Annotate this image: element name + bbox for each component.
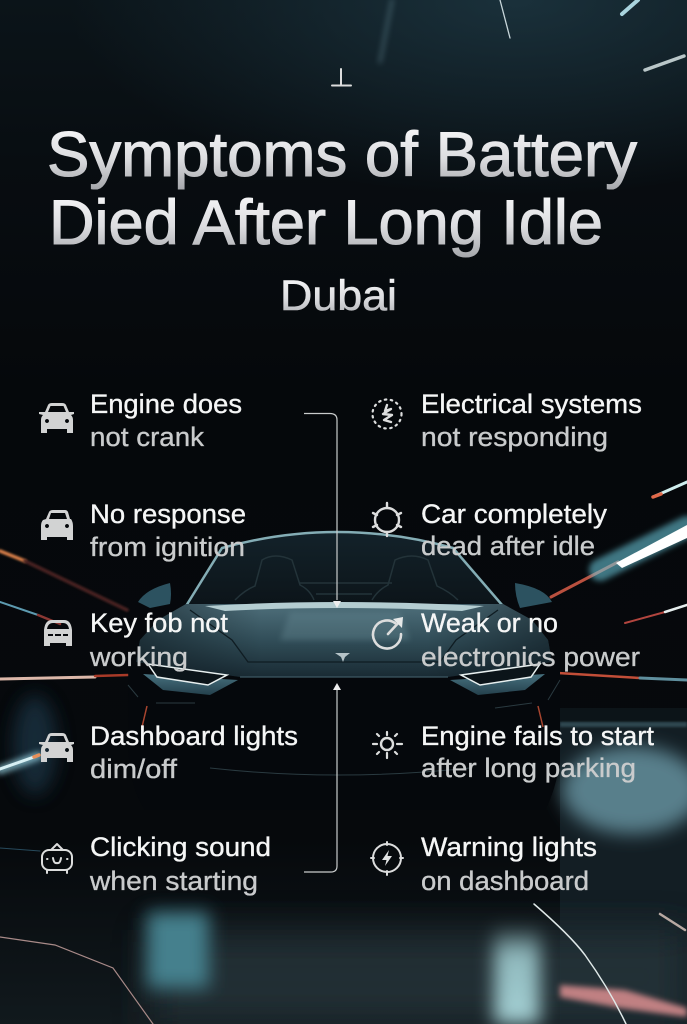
icon: car [39, 733, 74, 762]
icon: speaker box [42, 844, 72, 873]
label: working [89, 642, 188, 672]
car: left mirror [138, 583, 171, 608]
car: left headlight [148, 664, 227, 685]
icon: car [44, 620, 72, 646]
car: right bumper fin [450, 674, 545, 695]
label: Weak or no [421, 608, 558, 638]
car: lower body [128, 650, 560, 810]
arrow: top connector [304, 414, 341, 608]
symptom: weak or no electronics power [373, 608, 640, 672]
car: hood highlight [205, 602, 484, 611]
label: from ignition [90, 532, 245, 562]
car: right mirror [515, 583, 552, 608]
car: red accents [142, 706, 543, 727]
logo mark [332, 69, 351, 86]
label: Car completely [421, 499, 608, 529]
label: Engine does [90, 389, 242, 419]
label [421, 832, 597, 896]
icon: circle with arrow [373, 617, 403, 648]
icon: dotted circle [372, 400, 402, 428]
icon: car [41, 510, 73, 540]
label: not responding [421, 422, 608, 452]
symptom: electrical systems not responding [372, 389, 642, 452]
label: Key fob not [90, 608, 228, 638]
car [128, 532, 560, 810]
label: dead after idle [421, 531, 595, 561]
label: Electrical systems [421, 389, 642, 419]
label [90, 499, 246, 562]
car: left bumper fin [143, 674, 238, 695]
symptom: engine fails to start after long parking [373, 721, 654, 783]
label: on dashboard [421, 866, 589, 896]
label: not crank [90, 422, 205, 452]
car: roof and windshield [186, 532, 503, 606]
icon: circle with bolt [371, 842, 403, 875]
label: Dashboard lights [90, 721, 298, 751]
label [90, 721, 298, 784]
label: Warning lights [421, 832, 597, 862]
title: Died After Long Idle [49, 188, 603, 258]
icon: sun [373, 732, 402, 758]
label: when starting [89, 866, 258, 896]
symptom: clicking sound when starting [42, 832, 271, 896]
subtitle: Dubai [280, 272, 397, 320]
label: electronics power [421, 642, 640, 672]
symptom: no response from ignition [41, 499, 246, 562]
symptom: engine does not crank [39, 389, 242, 452]
label: after long parking [421, 753, 636, 783]
label [89, 832, 271, 896]
label: No response [90, 499, 246, 529]
title [47, 120, 637, 258]
car: logo [335, 653, 350, 662]
symptom: car completely dead after idle [373, 499, 608, 561]
label: Clicking sound [90, 832, 271, 862]
car: right headlight [461, 664, 540, 685]
label: Engine fails to start [421, 721, 654, 751]
arrow: bottom connector [304, 683, 341, 872]
symptom: warning lights on dashboard [371, 832, 597, 896]
label [89, 608, 228, 672]
icon: ring with ticks [373, 503, 401, 536]
car: seats [235, 556, 458, 600]
label [421, 389, 642, 452]
symptom: key fob not working [44, 608, 228, 672]
label: dim/off [90, 754, 178, 784]
label [421, 608, 640, 672]
label [90, 389, 242, 452]
car: hood lower edge [240, 676, 448, 678]
symptom: dashboard lights dim or off [39, 721, 298, 784]
label [421, 721, 654, 783]
label [421, 499, 608, 561]
wet floor and reflections [13, 695, 687, 1024]
car: hood [136, 604, 552, 677]
title: Symptoms of Battery [47, 120, 637, 190]
icon: car [39, 403, 74, 433]
